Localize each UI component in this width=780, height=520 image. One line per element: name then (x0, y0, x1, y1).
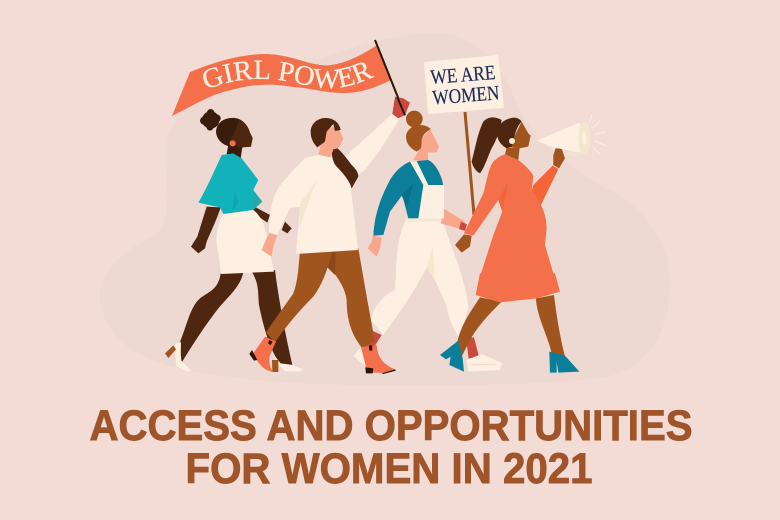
woman 1: teal top and cream skirt (165, 109, 303, 372)
title (90, 403, 692, 493)
sign: we are women: WOMEN (432, 82, 500, 109)
woman 2: cream sweater and brown trousers (249, 97, 410, 374)
red hand holding the pole (392, 97, 410, 118)
sign: we are women: WE ARE (430, 62, 496, 89)
title: FOR WOMEN IN 2021 (186, 446, 592, 493)
sign: we are women (424, 55, 504, 215)
title: ACCESS AND OPPORTUNITIES (90, 403, 692, 450)
banner: girl power: GIRL POWER (203, 60, 374, 89)
background blob (100, 33, 670, 385)
banner: girl power (172, 40, 406, 116)
woman 3: teal shirt and cream overalls (353, 111, 503, 372)
woman 4: orange dress, teal heels and megaphone (440, 114, 607, 373)
